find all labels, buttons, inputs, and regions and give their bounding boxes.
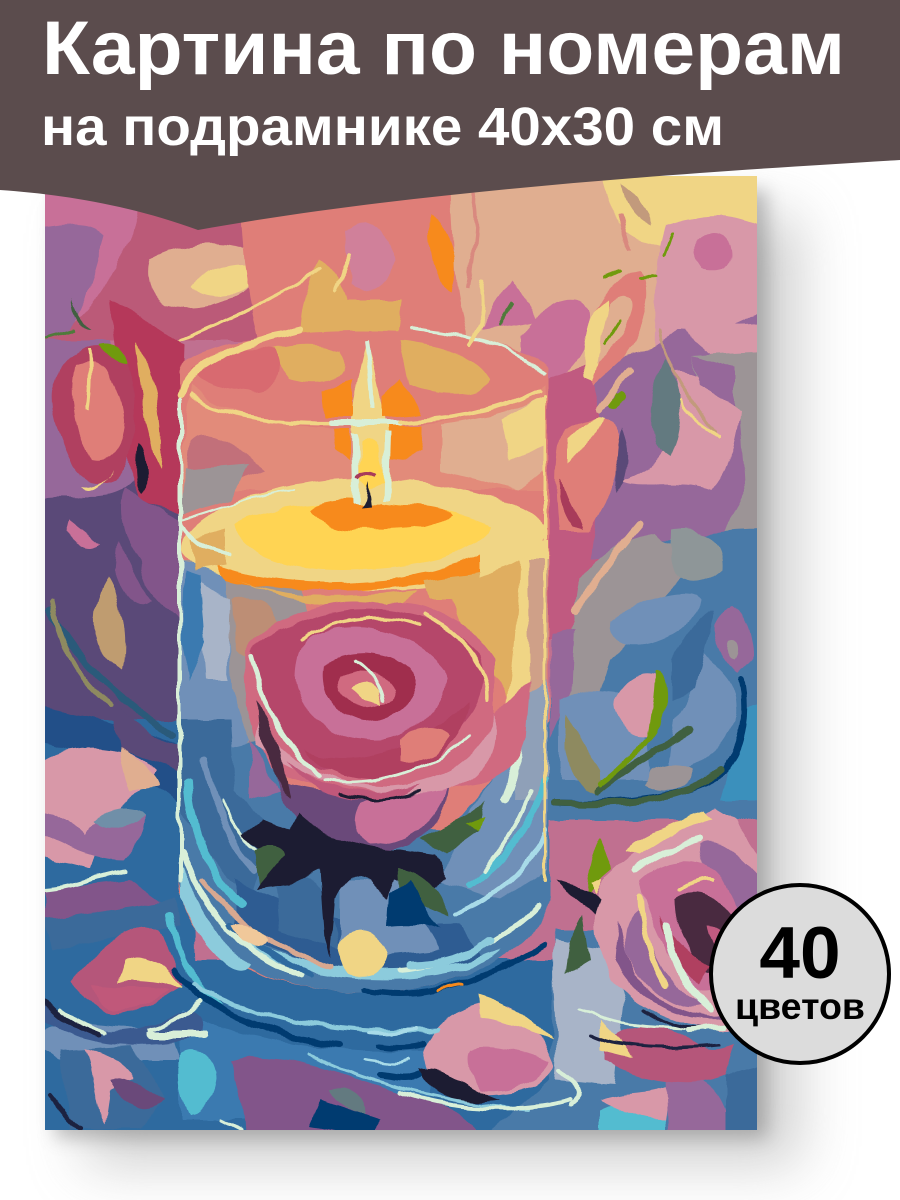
title: Картина по номерам [42,6,845,91]
small right bud and pink bud [566,604,753,794]
colour count badge [711,885,889,1063]
subtitle: на подрамнике 40х30 см [41,97,724,157]
background right side [520,215,780,820]
left rose bud [52,298,161,495]
glass highlights [183,749,549,978]
wax surface [182,478,545,606]
glass rim [180,328,545,880]
bud: upper right [557,270,647,530]
lower glass [178,720,550,992]
upper glass tones [178,385,548,490]
dark sepals and stem [242,800,485,957]
candle flame [322,340,422,508]
canvas drop shadow [55,190,800,1165]
painting on stretcher [30,170,780,1140]
glass cylinder [178,330,550,992]
leaves left of right rose [556,840,612,975]
table petals [45,928,555,1102]
colour count badge: 40 [759,913,841,994]
lower light strokes [45,872,720,1130]
background left side [45,300,184,722]
grey leaf [652,360,680,458]
left bud leaf [94,578,124,670]
rose in glass [244,601,530,851]
stems and green strokes [45,233,745,804]
background upper left and top [45,176,757,373]
lower background [30,700,780,1140]
colour count badge: цветов [735,986,865,1027]
below wax [184,560,308,744]
right side rose [595,808,770,1030]
header banner [0,0,900,230]
